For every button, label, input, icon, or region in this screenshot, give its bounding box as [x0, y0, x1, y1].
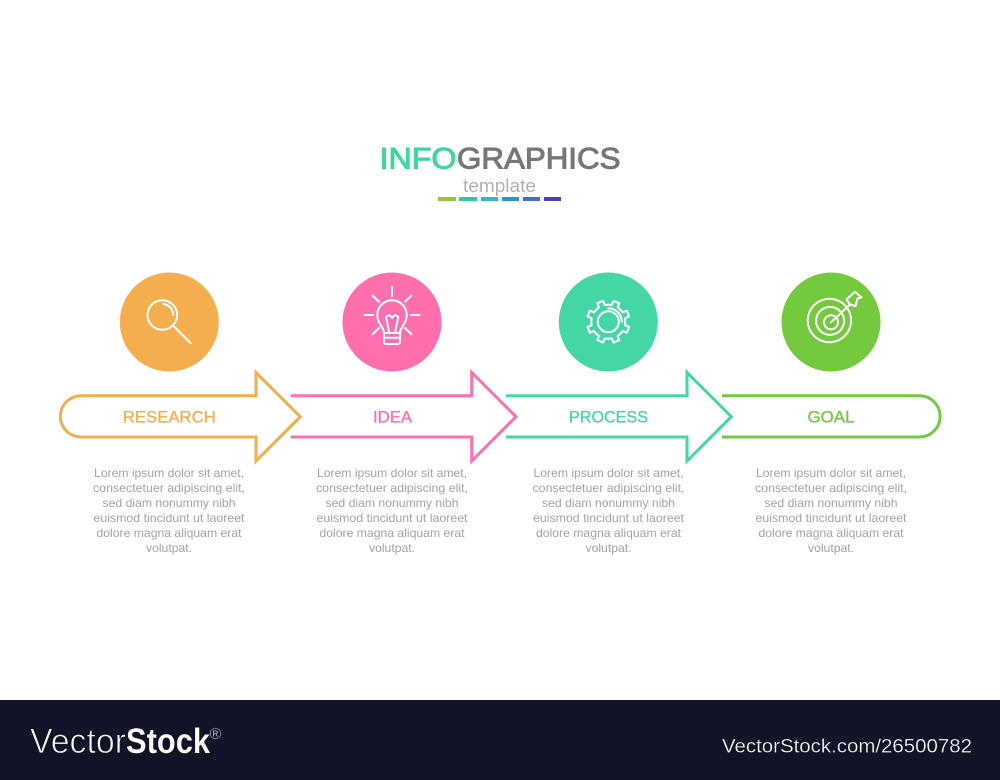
description: goal: consectetuer adipiscing elit,: [755, 481, 907, 495]
description: goal: euismod tincidunt ut laoreet: [756, 511, 907, 525]
description: goal: dolore magna aliquam erat: [758, 526, 904, 540]
description: goal: sed diam nonummy nibh: [764, 496, 898, 510]
description: research: Lorem ipsum dolor sit amet,: [94, 466, 244, 480]
footer logo: Vector: [30, 722, 126, 761]
description: idea: sed diam nonummy nibh: [326, 496, 458, 510]
footer logo: Stock: [126, 722, 210, 761]
step 4: goal: [722, 272, 940, 555]
description: process: euismod tincidunt ut laoreet: [533, 511, 685, 525]
description: research: sed diam nonummy nibh: [102, 496, 236, 510]
footer image id: VectorStock.com/26500782: [722, 736, 972, 758]
arrow: process: [506, 372, 731, 461]
description: process: dolore magna aliquam erat: [536, 526, 682, 540]
icon: gear: [586, 300, 630, 344]
icon: magnifying glass: [148, 300, 190, 343]
label: idea: IDEA: [373, 407, 413, 426]
step 3: process: [506, 272, 731, 555]
description: research: euismod tincidunt ut laoreet: [94, 511, 245, 525]
description: idea: Lorem ipsum dolor sit amet,: [317, 466, 467, 480]
arrow: idea: [291, 372, 516, 461]
description: research: consectetuer adipiscing elit,: [93, 481, 245, 495]
description: goal: Lorem ipsum dolor sit amet,: [756, 466, 906, 480]
description: research: dolore magna aliquam erat: [96, 526, 242, 540]
description: process: [532, 466, 685, 555]
icon: target with arrow: [808, 292, 862, 342]
icon: light bulb: [364, 287, 420, 344]
description: goal: volutpat.: [808, 541, 854, 555]
description: research: [93, 466, 245, 555]
footer logo: ®: [210, 726, 222, 743]
description: idea: consectetuer adipiscing elit,: [316, 481, 468, 495]
description: idea: dolore magna aliquam erat: [320, 526, 465, 540]
description: idea: volutpat.: [369, 541, 415, 555]
title: [380, 142, 620, 176]
description: research: volutpat.: [146, 541, 192, 555]
icon circle: idea: [342, 272, 442, 372]
label: process: PROCESS: [569, 407, 648, 426]
icon circle: goal: [782, 272, 880, 372]
description: process: consectetuer adipiscing elit,: [532, 481, 684, 495]
label: goal: GOAL: [808, 407, 854, 426]
arrow: research: [60, 372, 300, 461]
description: goal: [755, 466, 907, 555]
description: idea: euismod tincidunt ut laoreet: [316, 511, 468, 525]
description: process: volutpat.: [586, 541, 632, 555]
description: idea: [316, 466, 468, 555]
title: GRAPHICS: [457, 142, 620, 176]
step 2: idea: [291, 272, 516, 555]
title: INFO: [380, 142, 456, 176]
description: process: sed diam nonummy nibh: [542, 496, 675, 510]
footer logo: [30, 722, 222, 761]
arrow bar: goal: [722, 396, 940, 437]
step 1: research: [60, 272, 300, 555]
colour dashes: [438, 197, 561, 201]
icon circle: process: [559, 272, 658, 372]
icon circle: research: [120, 272, 219, 372]
description: process: Lorem ipsum dolor sit amet,: [534, 466, 684, 480]
subtitle: template: [463, 176, 536, 196]
footer bar: [0, 700, 1000, 780]
label: research: RESEARCH: [123, 407, 216, 426]
